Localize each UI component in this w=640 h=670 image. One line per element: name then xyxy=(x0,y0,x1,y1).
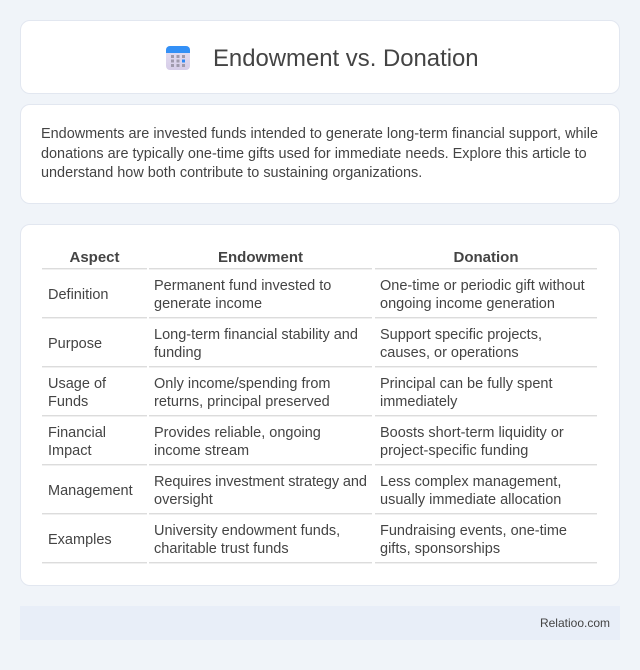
row: Definition: One-time or periodic gift without xyxy=(380,278,585,294)
row: Purpose: Support specific projects, xyxy=(380,327,542,343)
row: Purpose xyxy=(48,327,542,361)
row: Usage of Funds xyxy=(48,376,552,410)
row: Management: Requires investment strategy and xyxy=(154,474,367,490)
title: Endowment vs. Donation xyxy=(213,45,479,72)
row: Usage of Funds: immediately xyxy=(380,394,457,410)
row: Usage of Funds: Only income/spending from xyxy=(154,376,330,392)
row: Management: usually immediate allocation xyxy=(380,492,561,508)
row: Definition: Definition xyxy=(48,287,108,303)
text block: introduction xyxy=(41,126,598,181)
row: Management xyxy=(48,474,561,508)
row: Usage of Funds: Principal can be fully spent xyxy=(380,376,552,392)
table header: Aspect xyxy=(69,249,120,266)
row: Examples: charitable trust funds xyxy=(154,541,289,557)
row: Definition: generate income xyxy=(154,296,262,312)
row: Examples: gifts, sponsorships xyxy=(380,541,500,557)
table header xyxy=(69,249,518,266)
icon: calendar xyxy=(166,46,190,70)
row: Purpose: Purpose xyxy=(48,336,102,352)
row: Financial Impact: project-specific funding xyxy=(380,443,528,459)
row: Management: oversight xyxy=(154,492,213,508)
row: Financial Impact: Impact xyxy=(48,443,92,459)
row: Examples xyxy=(48,523,567,557)
row: Examples: Examples xyxy=(48,532,112,548)
row: Definition: Permanent fund invested to xyxy=(154,278,331,294)
row: Usage of Funds: Usage of xyxy=(48,376,106,392)
table header: Donation xyxy=(454,249,518,266)
panel: title header xyxy=(20,20,620,94)
text block: introduction: donations are typically one-time gifts used for immediate needs. Explore this article to xyxy=(41,146,587,162)
row: Management: Management xyxy=(48,483,133,499)
row: Financial Impact: income stream xyxy=(154,443,249,459)
row: Examples: University endowment funds, xyxy=(154,523,340,539)
row: Usage of Funds: Funds xyxy=(48,394,88,410)
row: Examples: Fundraising events, one-time xyxy=(380,523,567,539)
row: Definition xyxy=(48,278,585,312)
row: Purpose: causes, or operations xyxy=(380,345,519,361)
row: Definition: ongoing income generation xyxy=(380,296,555,312)
panel: comparison table xyxy=(20,224,620,586)
footer xyxy=(20,606,620,640)
row: Management: Less complex management, xyxy=(380,474,561,490)
row: Financial Impact: Boosts short-term liquidity or xyxy=(380,425,564,441)
row: Usage of Funds: returns, principal preserved xyxy=(154,394,330,410)
row: Financial Impact: Financial xyxy=(48,425,106,441)
text block: introduction: understand how both contribute to sustaining organizations. xyxy=(41,165,422,181)
row: Purpose: funding xyxy=(154,345,202,361)
footer text: site name: Relatioo.com xyxy=(540,616,610,630)
panel: introduction xyxy=(20,104,620,204)
row: Financial Impact xyxy=(48,425,564,459)
row: Financial Impact: Provides reliable, ongoing xyxy=(154,425,321,441)
text block: introduction: Endowments are invested funds intended to generate long-term financial support, while xyxy=(41,126,598,142)
row: Purpose: Long-term financial stability and xyxy=(154,327,358,343)
table header: Endowment xyxy=(218,249,303,266)
